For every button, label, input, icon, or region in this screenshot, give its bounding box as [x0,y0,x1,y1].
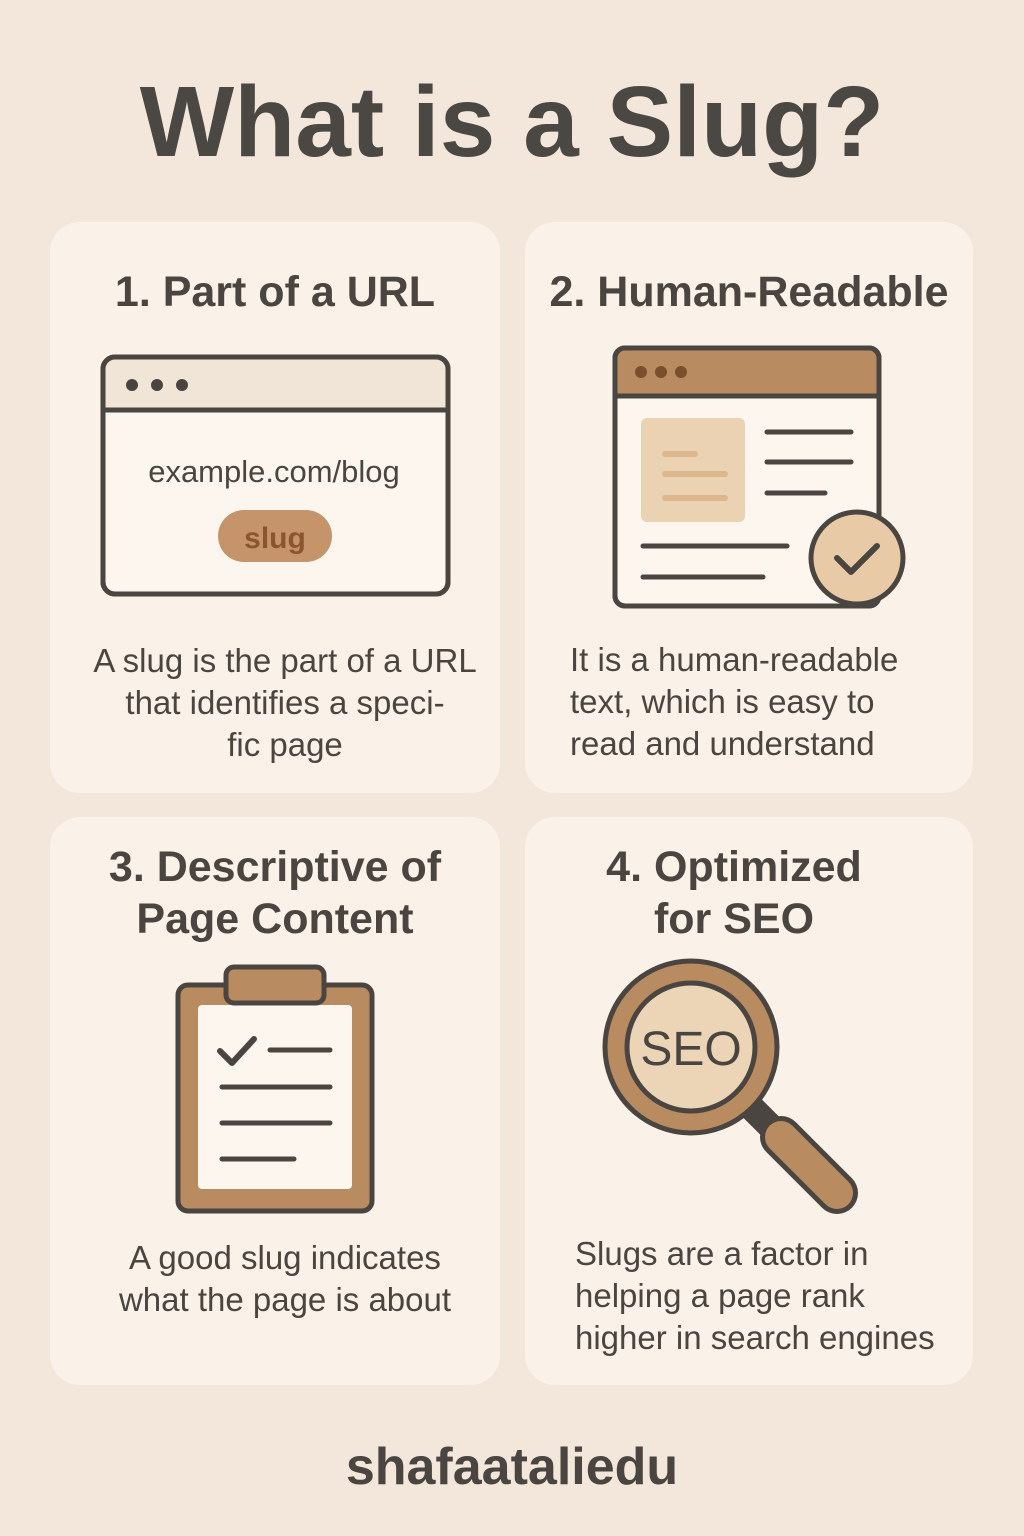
text 1: that identifies a speci- [125,684,445,721]
heading 2: 2. Human-Readable [549,268,949,316]
title: What is a Slug? [140,66,884,178]
panel: human-readable [525,222,973,793]
text 3 [119,1239,451,1318]
icon: browser with slug: slug [244,522,306,555]
heading 1: 1. Part of a URL [115,268,435,316]
icon: browser with slug [100,354,450,596]
text 1 [93,642,477,763]
panel: SEO [525,817,973,1385]
text 1: fic page [227,726,343,763]
heading 4: 4. Optimized [606,843,862,891]
text 2: text, which is easy to [570,683,874,720]
text 2: read and understand [570,725,875,762]
heading 4 [606,843,862,943]
icon: browser with slug: example.com/blog [148,454,400,489]
text 2: It is a human-readable [570,641,898,678]
text 4 [575,1235,935,1356]
heading 3: 3. Descriptive of [109,843,441,891]
icon: clipboard [176,964,374,1214]
text 4: higher in search engines [575,1319,935,1356]
heading 4: for SEO [654,895,814,943]
heading 3 [109,843,442,943]
icon: document with check [612,346,906,608]
text 4: Slugs are a factor in [575,1235,868,1272]
heading 3: Page Content [136,895,414,943]
panel: part of a URL [50,222,500,793]
text 1: A slug is the part of a URL [93,642,477,679]
text 3: what the page is about [119,1281,451,1318]
footer: shafaataliedu [346,1438,678,1496]
text 2 [570,641,898,762]
text 4: helping a page rank [575,1277,865,1314]
icon: magnifier SEO: SEO [640,1023,742,1076]
icon: magnifier SEO [602,958,858,1214]
text 3: A good slug indicates [129,1239,441,1276]
panel: descriptive [50,817,500,1385]
